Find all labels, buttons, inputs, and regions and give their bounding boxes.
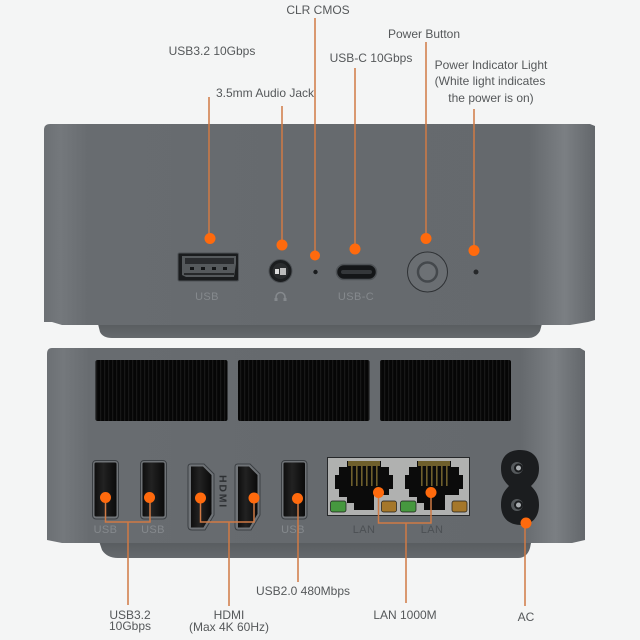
port: USB-C [336,264,376,303]
ports: USB pair: USB [94,524,117,536]
device body [44,124,595,325]
label: USB3.2 10Gbps bottom: 10Gbps [109,619,151,633]
callout dots: rear view [100,487,532,528]
callout lines: front view [209,18,474,255]
port: AC power inlet [501,450,539,525]
label: USB3.2 10Gbps bottom: USB3.2 [109,608,151,622]
label: Power Indicator Light: Power Indicator Light [435,58,548,72]
device body [47,348,585,543]
port: audio jack [269,260,292,301]
panel: rear view of device [47,348,585,558]
label: CLR CMOS: CLR CMOS [286,3,350,17]
label: HDMI: (Max 4K 60Hz) [189,620,269,634]
port: USB 2.0: USB [281,524,305,536]
label: HDMI [189,608,269,634]
ports: dual LAN: LAN [421,524,443,536]
label: USB-C 10Gbps: USB-C 10Gbps [330,51,412,65]
ports: dual LAN: LAN [353,524,375,536]
LAN socket 1 [335,461,393,510]
label: Power Indicator Light: (White light indicates [435,74,545,88]
callout dots: front view [204,233,480,260]
port: USB-A [178,253,238,303]
label: LAN 1000M: LAN 1000M [373,608,437,622]
ports: USB pair [92,460,166,536]
ports: dual LAN [328,458,470,536]
ventilation grilles [96,360,511,421]
callout lines: rear view [106,492,525,606]
ports: USB pair: USB [141,524,165,536]
label: AC: AC [518,610,535,624]
label: USB2.0 480Mbps: USB2.0 480Mbps [256,584,350,598]
LAN socket 2 [405,461,463,510]
ports: HDMI pair [188,464,260,530]
power indicator light [474,270,478,274]
label: Power Indicator Light [435,58,548,105]
label: USB3.2 10Gbps top: USB3.2 10Gbps [169,44,255,58]
port: USB 2.0 [281,460,307,536]
port: USB-C: USB-C [338,291,374,303]
ports: HDMI pair: HDMI [216,475,228,509]
label: USB3.2 10Gbps bottom [109,608,151,633]
panel: front view of device [44,124,595,338]
label: 3.5mm Audio Jack: 3.5mm Audio Jack [216,86,315,100]
port: USB-A: USB [195,291,219,303]
label: HDMI: HDMI [214,608,244,622]
port: CLR CMOS hole [313,270,318,274]
device foot [98,538,532,558]
label: Power Button: Power Button [388,27,460,41]
device foot [97,320,543,338]
power button [408,252,448,292]
label: Power Indicator Light: the power is on) [448,91,534,105]
